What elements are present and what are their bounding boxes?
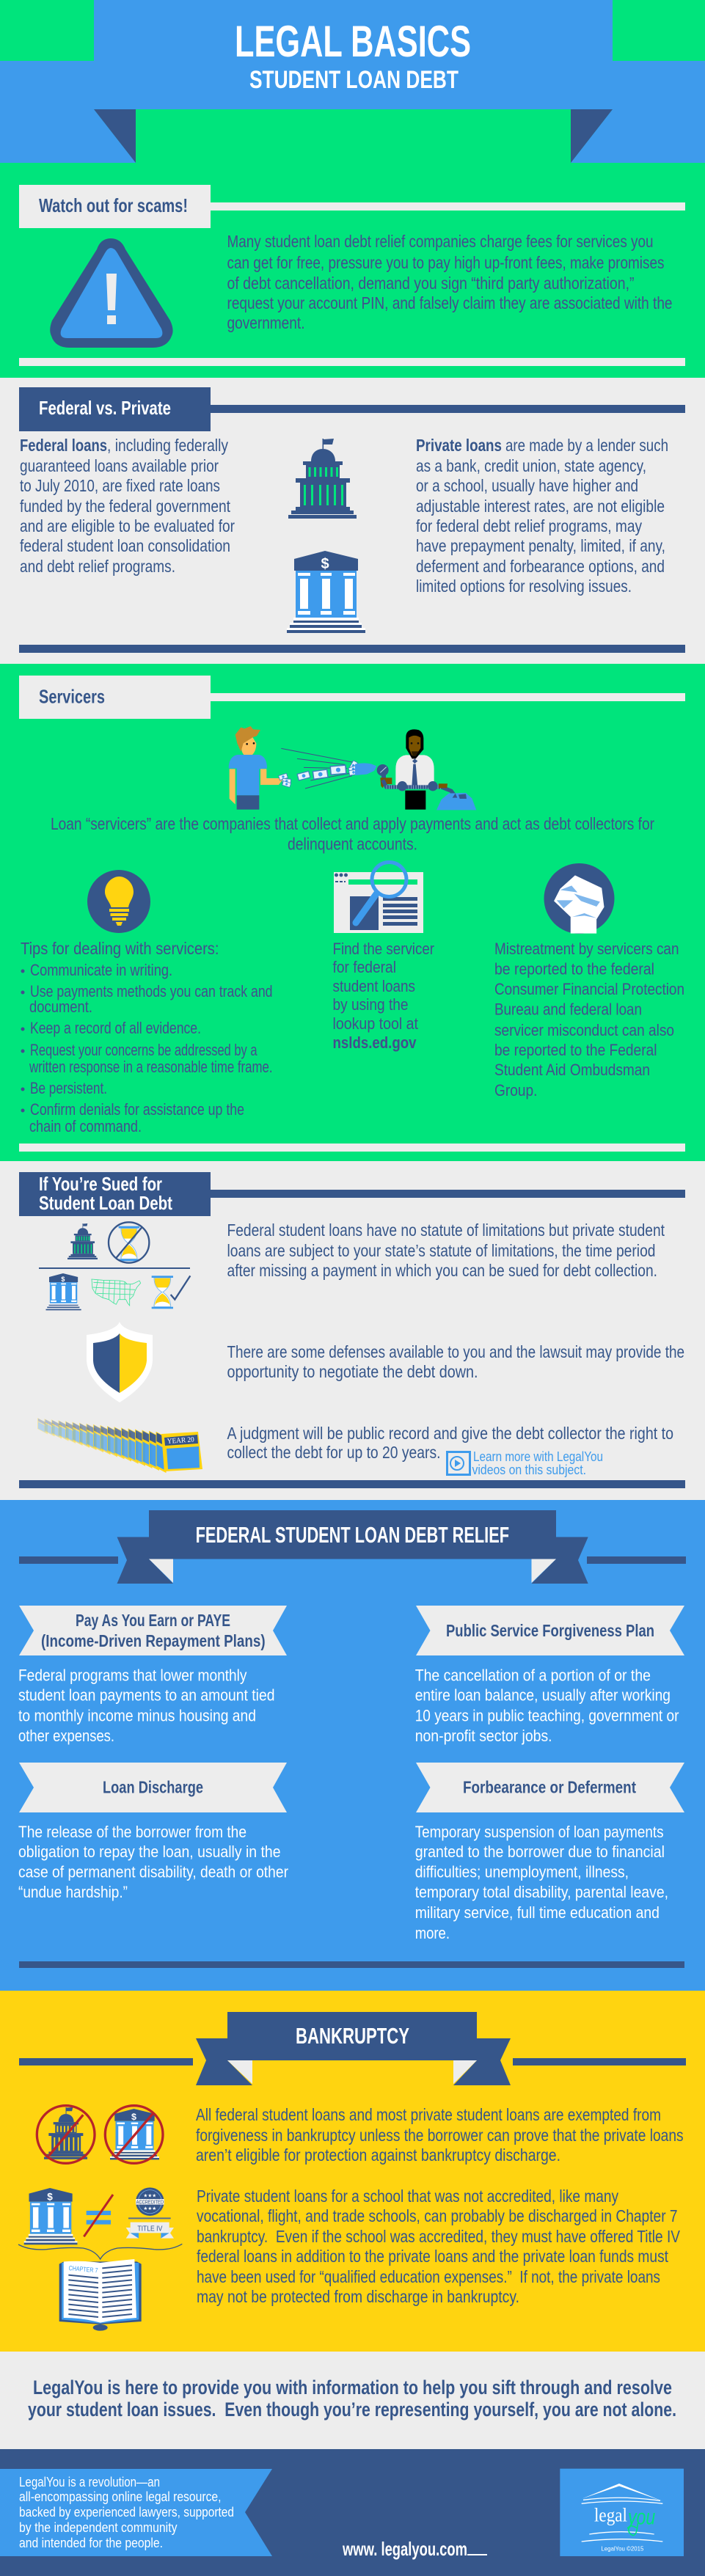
panel: footer [0, 2449, 705, 2576]
card: loan discharge: obligation to repay the loan, usually in the [18, 1843, 280, 1861]
icon: US states map [92, 1279, 141, 1306]
heading: watch out for scams [19, 185, 685, 228]
icon: private loan bank: $ [47, 2191, 53, 2203]
heading: watch out for scams: Watch out for scams! [39, 194, 188, 216]
text: mistreatment by servicers: be reported to the federal [494, 959, 654, 978]
icon: bank building [287, 551, 365, 633]
text: servicers intro: delinquent accounts. [288, 835, 417, 854]
card: PAYE [18, 1606, 287, 1745]
icon: accredited badge and Title IV banner: ★★★ [143, 2206, 156, 2211]
text: find the servicer: student loans [333, 977, 415, 995]
text: scams paragraph: of debt cancellation, demand you sign “third party authorization,” [227, 274, 634, 293]
icon: browser with magnifier [334, 863, 423, 933]
text: federal loans: , including federally [107, 436, 228, 455]
icon: chapter 7 book: CHAPTER 7 [68, 2264, 98, 2274]
text: federal loans: funded by the federal government [20, 497, 230, 516]
callout: video link [446, 1449, 603, 1477]
card: forbearance or deferment: granted to the borrower due to financial [415, 1843, 665, 1861]
card: loan discharge [18, 1763, 288, 1901]
panel: servicers [0, 664, 705, 1161]
text: find the servicer: nslds.ed.gov [333, 1033, 417, 1052]
text: federal loans: and debt relief programs. [20, 557, 175, 576]
heading: federal vs private: Federal vs. Private [39, 397, 171, 419]
about LegalYou ribbon [0, 2469, 272, 2556]
heading: if you're sued [19, 1172, 685, 1216]
text: federal loans: guaranteed loans available prior [20, 456, 219, 475]
illustration: borrower and debt collector [229, 726, 476, 810]
icon: not equal sign [84, 2195, 113, 2236]
heading: servicers: Servicers [39, 685, 105, 707]
text: scams paragraph: government. [227, 313, 305, 332]
about LegalYou ribbon: and intended for the people. [19, 2535, 163, 2550]
text: federal loans: federal student loan consolidation [20, 536, 230, 555]
icon: capitol building [288, 439, 357, 519]
card: forbearance or deferment: temporary total disability, parental leave, [415, 1883, 668, 1901]
text: servicers intro [51, 814, 654, 854]
heading: federal vs private [19, 387, 685, 431]
text: private loans: are made by a lender such [505, 436, 668, 455]
text: find the servicer: by using the [333, 995, 408, 1014]
card: forbearance or deferment: difficulties; unemployment, illness, [415, 1863, 629, 1881]
text: tips for dealing with servicers: Keep a record of all evidence. [30, 1019, 201, 1037]
icon: accredited badge and Title IV banner: TITLE IV [137, 2225, 163, 2233]
about LegalYou ribbon: by the independent community [19, 2520, 178, 2535]
text: mistreatment by servicers: Bureau and federal loan [494, 1000, 642, 1018]
card: forbearance or deferment: Temporary suspension of loan payments [415, 1823, 664, 1841]
card: PAYE: student loan payments to an amount tied [18, 1686, 274, 1705]
card: PAYE: Federal programs that lower monthly [18, 1666, 247, 1684]
card: public service forgiveness: Public Service Forgiveness Plan [446, 1621, 654, 1640]
text: tips for dealing with servicers: Be persistent. [30, 1079, 107, 1097]
borrower figure [229, 726, 284, 810]
text: defenses [227, 1342, 684, 1381]
heading ribbon: federal student loan debt relief [19, 1510, 686, 1584]
text: private loans: for federal debt relief programs, may [416, 516, 642, 535]
text: tips for dealing with servicers: written response in a reasonable time frame. [29, 1058, 273, 1076]
title: LEGAL BASICS [235, 17, 471, 66]
text: federal loans: to July 2010, are fixed rate loans [20, 476, 220, 495]
icon: no private loan [105, 2106, 163, 2163]
icon: bank building: $ [321, 556, 329, 572]
card: forbearance or deferment: military service, full time education and [415, 1903, 660, 1922]
icon: accredited badge and Title IV banner: ACCREDITED [136, 2200, 164, 2205]
icon: light bulb [87, 870, 150, 933]
money stream [279, 748, 358, 788]
icon: stack of twenty calendars [37, 1418, 202, 1473]
panel: federal vs private [0, 378, 705, 664]
text: tips for dealing with servicers: Confirm denials for assistance up the [30, 1100, 244, 1119]
text: mistreatment by servicers: Student Aid Ombudsman [494, 1061, 650, 1079]
card: PAYE: to monthly income minus housing and [18, 1707, 256, 1725]
collector figure with vacuum [355, 729, 476, 810]
card: loan discharge: “undue hardship.” [18, 1883, 128, 1901]
text: judgment: collect the debt for up to 20 years. [227, 1443, 440, 1462]
text: tips for dealing with servicers: Communicate in writing. [30, 961, 172, 979]
text: scams paragraph [227, 232, 672, 332]
logo: LegalYou: LegalYou ©2015 [601, 2545, 643, 2553]
text: mistreatment by servicers: Group. [494, 1081, 537, 1099]
text: tips for dealing with servicers: Tips for dealing with servicers: [21, 939, 219, 958]
text: federal loans [20, 436, 235, 576]
icon: accredited badge and Title IV banner [126, 2187, 174, 2239]
text: tips for dealing with servicers: chain of command. [29, 1117, 142, 1135]
text: mistreatment by servicers [494, 940, 684, 1099]
callout: video link: videos on this subject. [472, 1463, 586, 1477]
text: private loans: limited options for resolving issues. [416, 577, 632, 596]
text: defenses: opportunity to negotiate the debt down. [227, 1362, 478, 1381]
text: tips for dealing with servicers [21, 939, 273, 1135]
text: tips for dealing with servicers: Use payments methods you can track and [30, 982, 273, 1000]
icon: warning triangle [50, 238, 173, 348]
icon: private loan bank [24, 2188, 77, 2244]
panel: closing message [0, 2352, 705, 2449]
icon: stack of twenty calendars: YEAR 20 [167, 1435, 194, 1446]
heading: servicers [19, 676, 685, 719]
card: public service forgiveness: non-profit sector jobs. [415, 1727, 552, 1745]
logo: LegalYou [560, 2469, 684, 2556]
heading: if you're sued: If You’re Sued for [39, 1173, 162, 1195]
icon: no federal loan [37, 2106, 95, 2163]
text: private loans not accredited: may not be protected from discharge in bankruptcy. [197, 2287, 519, 2306]
text: mistreatment by servicers: be reported to the Federal [494, 1041, 657, 1059]
text: find the servicer: Find the servicer [333, 940, 434, 958]
icon: small bank [45, 1273, 81, 1310]
subtitle: STUDENT LOAN DEBT [249, 66, 459, 94]
card: loan discharge: The release of the borrower from the [18, 1823, 246, 1841]
card: loan discharge: case of permanent disability, death or other [18, 1863, 288, 1881]
text: private loans: or a school, usually have higher and [416, 476, 638, 495]
text: tips for dealing with servicers: document. [29, 998, 92, 1016]
text: exempted from forgiveness [196, 2105, 684, 2165]
text: statute of limitations [227, 1221, 665, 1280]
icon: no private loan: $ [131, 2112, 136, 2122]
card: forbearance or deferment: more. [415, 1924, 450, 1942]
website address: www. legalyou.com [342, 2538, 467, 2560]
heading ribbon: bankruptcy: BANKRUPTCY [296, 2023, 409, 2049]
icon: raised fist [544, 863, 615, 934]
text: find the servicer [333, 940, 434, 1052]
text: tips for dealing with servicers: Request your concerns be addressed by a [30, 1041, 257, 1059]
icon: accredited badge and Title IV banner: ★★★ [143, 2193, 156, 2199]
card: forbearance or deferment [415, 1763, 684, 1942]
panel: federal student loan debt relief [0, 1500, 705, 1991]
card: public service forgiveness: The cancellation of a portion of or the [415, 1666, 651, 1684]
panel: bankruptcy [0, 1991, 705, 2352]
text: find the servicer: for federal [333, 958, 396, 976]
text: exempted from forgiveness: aren’t eligible for protection against bankruptcy discharge. [196, 2145, 560, 2165]
icon: no hourglass [109, 1222, 149, 1263]
icon: brace above chapter 7 book [18, 2244, 182, 2259]
panel: if you are sued [0, 1161, 705, 1500]
about LegalYou ribbon: LegalYou is a revolution—an [19, 2474, 160, 2489]
text: federal loans: and are eligible to be evaluated for [20, 516, 235, 535]
text: mistreatment by servicers: servicer misconduct can also [494, 1021, 674, 1039]
about LegalYou ribbon: all-encompassing online legal resource, [19, 2489, 222, 2504]
callout: video link: Learn more with LegalYou [473, 1449, 603, 1464]
header banner [0, 0, 705, 163]
card: loan discharge: Loan Discharge [103, 1778, 203, 1797]
text: judgment [227, 1424, 673, 1462]
card: public service forgiveness [415, 1606, 684, 1745]
card: PAYE: other expenses. [18, 1727, 114, 1745]
heading ribbon: bankruptcy [19, 2012, 686, 2085]
card: PAYE: Pay As You Earn or PAYE [76, 1611, 230, 1630]
heading: if you're sued: Student Loan Debt [39, 1192, 172, 1214]
heading ribbon: federal student loan debt relief: FEDERAL STUDENT LOAN DEBT RELIEF [196, 1522, 509, 1548]
text: private loans [416, 436, 668, 596]
icon: shield [87, 1322, 153, 1402]
icon: hourglass with check [152, 1276, 190, 1309]
text: private loans not accredited: Private student loans for a school that was not accredited, like many [197, 2187, 618, 2206]
logo: LegalYou: legal [594, 2503, 627, 2525]
about LegalYou ribbon: backed by experienced lawyers, supported [19, 2504, 234, 2520]
panel: scams [0, 0, 705, 378]
icon: small capitol [67, 1223, 98, 1259]
text: find the servicer: lookup tool at [333, 1014, 419, 1033]
text: federal loans: Federal loans [20, 436, 107, 455]
card: forbearance or deferment: Forbearance or Deferment [463, 1778, 636, 1797]
text: private loans: Private loans [416, 436, 502, 455]
logo: LegalYou: you [627, 2506, 656, 2530]
icon: chapter 7 book [59, 2259, 142, 2331]
text: private loans not accredited [197, 2187, 680, 2306]
text: private loans: as a bank, credit union, state agency, [416, 456, 646, 475]
icon: small bank: $ [61, 1276, 65, 1283]
card: PAYE: (Income-Driven Repayment Plans) [41, 1631, 266, 1650]
